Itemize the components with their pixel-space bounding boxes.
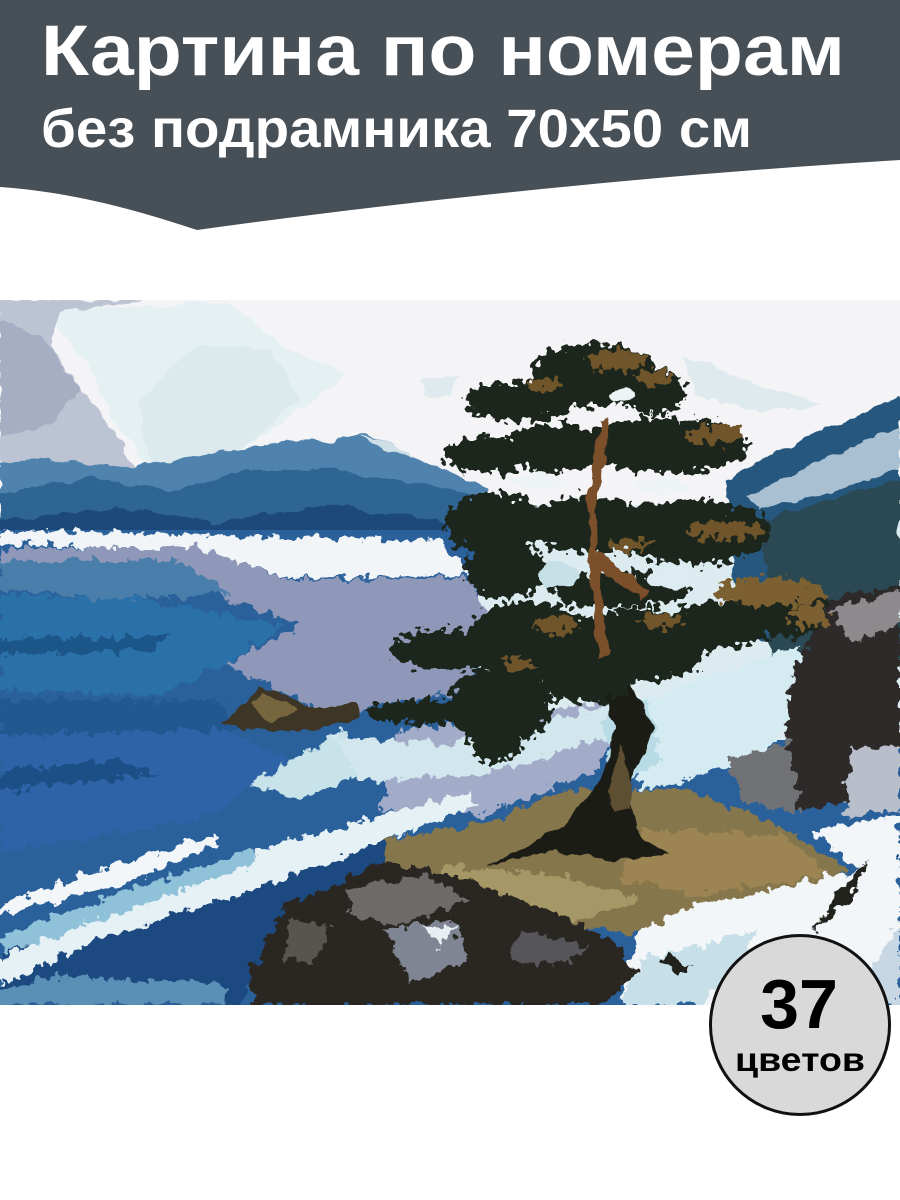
tree branches xyxy=(587,418,648,658)
foliage xyxy=(367,343,830,763)
sunlit foliage xyxy=(504,350,830,672)
pine tree xyxy=(367,343,830,865)
sky gaps in foliage xyxy=(532,386,690,591)
snow and far shore right xyxy=(600,585,900,815)
painting: lake landscape with pine tree xyxy=(0,300,900,1005)
tree trunk and roots xyxy=(490,670,670,865)
header banner xyxy=(0,0,900,230)
small rock in water xyxy=(222,686,358,732)
title: Картина по номерам xyxy=(41,12,845,91)
number of colors: 37 xyxy=(760,965,838,1043)
color count badge xyxy=(710,936,890,1114)
distant mountains xyxy=(0,433,489,530)
sky and clouds xyxy=(0,300,900,540)
grassy ledge xyxy=(380,790,850,935)
foreground rocks xyxy=(248,860,635,1005)
snow foreground xyxy=(620,815,900,1005)
right mountain slope xyxy=(725,395,900,660)
lake water xyxy=(0,505,900,1005)
subtitle: без подрамника 70х50 см xyxy=(41,99,752,159)
colors label: цветов xyxy=(735,1041,865,1078)
